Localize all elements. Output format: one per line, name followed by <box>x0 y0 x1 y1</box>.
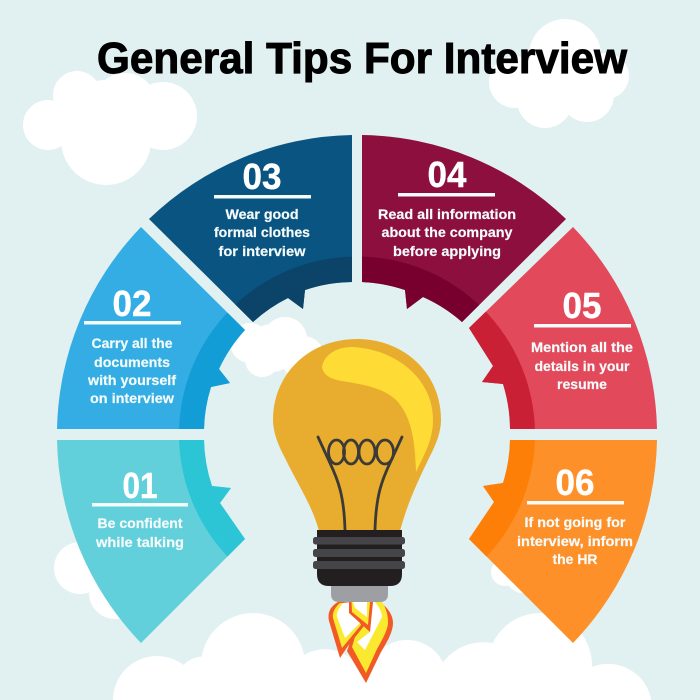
panel: tip 01 <box>57 440 245 643</box>
cloud: lower right <box>491 558 537 593</box>
base ridges <box>313 537 405 569</box>
text: tip 03: formal clothes <box>214 224 310 240</box>
text: tip 02 <box>87 335 176 406</box>
text: tip 01: Be confident <box>98 515 183 531</box>
text: tip 04: about the company <box>382 224 513 240</box>
bulb glass <box>273 339 441 531</box>
panel: tip 02 <box>57 227 245 429</box>
panel: tip 03: 03 <box>242 156 282 197</box>
cloud: bottom bank <box>113 613 651 700</box>
panel: tip 02: 02 <box>112 283 152 324</box>
cloud: lower left <box>54 542 141 619</box>
text: tip 01: while talking <box>95 534 184 550</box>
text: tip 05 <box>531 339 633 392</box>
text: tip 03 <box>214 206 310 259</box>
text: tip 01 <box>95 515 184 550</box>
text: tip 06: If not going for <box>524 514 626 530</box>
text: tip 02: Carry all the <box>92 335 173 351</box>
bulb nozzle <box>331 584 388 602</box>
text: tip 03: Wear good <box>226 206 298 222</box>
icon: rocket flames <box>328 602 393 683</box>
bulb highlight <box>322 347 433 472</box>
text: tip 02: with yourself <box>87 372 176 388</box>
text: tip 05: resume <box>557 376 607 392</box>
text: tip 06: interview, inform <box>517 533 633 549</box>
bulb screw base <box>317 530 402 586</box>
text: tip 05: Mention all the <box>531 339 633 355</box>
panel: tip 04 <box>362 135 566 322</box>
panel: tip 05 <box>469 227 657 429</box>
text: tip 02: on interview <box>90 390 174 406</box>
text: tip 04 <box>378 206 516 259</box>
panel: tip 01: 01 <box>122 465 158 506</box>
text: tip 04: before applying <box>393 243 501 259</box>
cloud: top left <box>23 71 197 185</box>
text: tip 05: details in your <box>534 358 630 374</box>
text: tip 06: the HR <box>552 551 598 567</box>
text: tip 06 <box>517 514 633 567</box>
panel: tip 06: 06 <box>556 462 594 503</box>
title: General Tips For Interview <box>97 34 628 83</box>
cloud: behind bulb <box>230 317 325 380</box>
cloud: top right <box>489 19 629 128</box>
panel: tip 05: 05 <box>562 285 602 326</box>
text: tip 03: for interview <box>218 243 306 259</box>
filament <box>318 437 402 530</box>
text: tip 04: Read all information <box>378 206 516 222</box>
panel: tip 04: 04 <box>428 154 466 195</box>
text: tip 02: documents <box>94 354 170 370</box>
panel: tip 03 <box>149 135 352 322</box>
panel: tip 06 <box>469 440 657 643</box>
icon: light bulb <box>273 339 441 602</box>
